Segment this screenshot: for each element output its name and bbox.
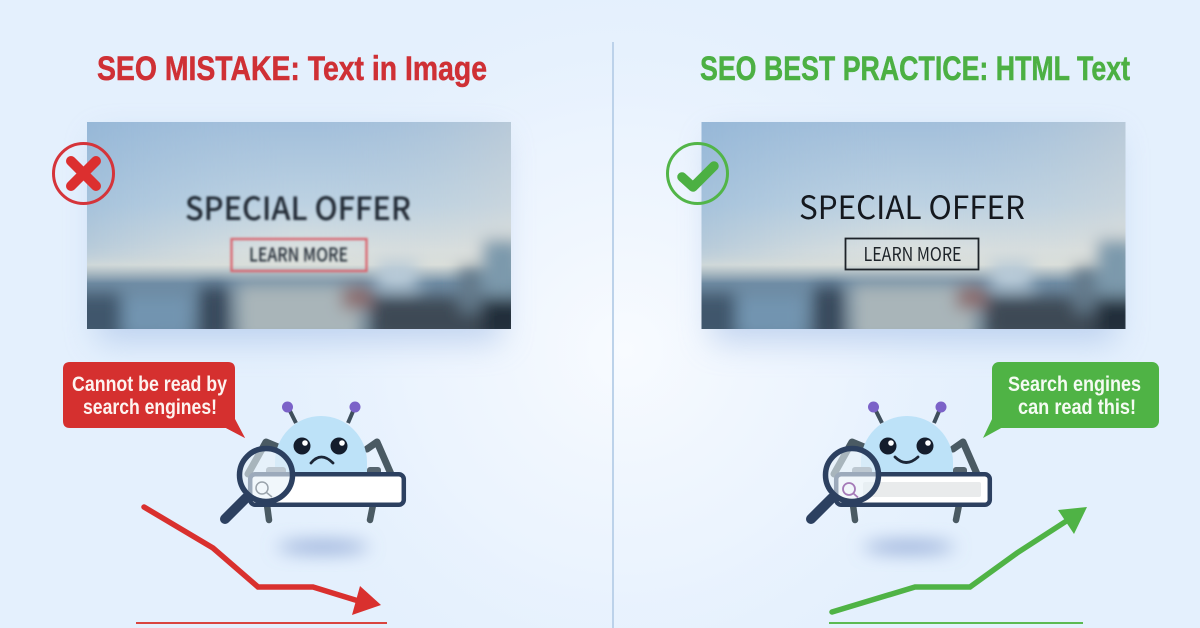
icon: sad robot with search bar and magnifier [225,402,404,552]
baseline: rising chart [829,622,1083,624]
callout: can read [983,362,1159,438]
crisp button: LEARN MORE [864,240,962,267]
blurred button: LEARN MORE [249,240,348,268]
callout: cannot be read: Cannot be read by [72,373,227,396]
callout: can read: Search engines [1008,373,1141,396]
banner image with text baked in [84,122,516,356]
callout: can read: can read this! [1018,396,1136,419]
icon: red cross badge [54,144,114,204]
banner image with live HTML text [697,122,1128,356]
callout: cannot be read [63,362,245,438]
panel: SEO mistake [47,50,551,624]
rising rank arrow [832,507,1087,612]
blurred headline: SPECIAL OFFER [185,184,411,230]
baseline: falling chart [136,622,387,624]
callout: cannot be read: search engines! [83,396,217,419]
falling rank arrow [144,507,381,615]
icon: green check badge [668,144,728,204]
icon: happy robot with search bar and magnifier [811,402,990,552]
panel: SEO best practice [662,50,1166,624]
center divider [612,42,614,628]
heading: SEO mistake: SEO MISTAKE: Text in Image [97,50,487,88]
crisp headline: SPECIAL OFFER [799,183,1025,229]
